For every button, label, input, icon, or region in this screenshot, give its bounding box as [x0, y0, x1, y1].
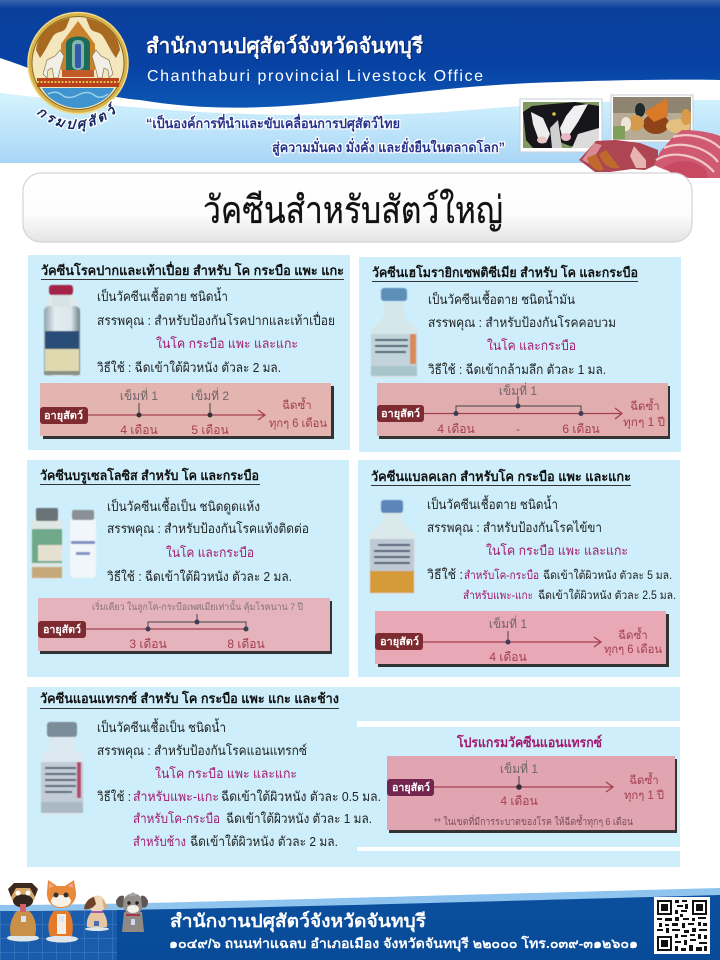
icon: vaccine bottle — [371, 288, 417, 378]
vaccine description: วิธีใช้ : — [96, 789, 131, 804]
panel: foot and mouth disease vaccine — [28, 255, 350, 450]
footer banner — [0, 880, 720, 960]
vaccine description — [427, 290, 616, 377]
vaccine description: เป็นวัคซีนเชื้อตาย ชนิดน้ำมัน — [428, 290, 575, 307]
vaccine description: เป็นวัคซีนเชื้อตาย ชนิดน้ำ — [97, 287, 228, 304]
vaccine description: สรรพคุณ : สำหรับป้องกันโรคแท้งติดต่อ — [107, 521, 309, 537]
footer office name: สำนักงานปศุสัตว์จังหวัดจันทบุรี — [170, 910, 426, 933]
vaccine description: เป็นวัคซีนเชื้อตาย ชนิดน้ำ — [427, 495, 558, 512]
logo: department seal — [28, 12, 128, 114]
header banner — [0, 0, 720, 178]
vaccine description: เป็นวัคซีนเชื้อเป็น ชนิดน้ำ — [97, 718, 226, 735]
main title: วัคซีนสำหรับสัตว์ใหญ่ — [203, 189, 503, 232]
schedule chart: เริ่มเคียว ในลูกโค-กระบือเพศเมียเท่านั้น คุ้มโรคนาน 7 ปี — [92, 600, 303, 613]
vaccine description: ในโค และกระบือ — [166, 545, 254, 560]
slogan: สู่ความมั่นคง มั่งคั่ง และยั่งยืนในตลาดโลก” — [272, 137, 505, 156]
photo: meat — [579, 130, 720, 178]
schedule chart: 5 เดือน — [191, 423, 229, 437]
photo: cows — [520, 99, 602, 152]
schedule chart: ฉีดซ้ำ — [630, 398, 660, 413]
vaccine description: ในโค กระบือ แพะ และแกะ — [156, 336, 298, 351]
schedule chart: 4 เดือน — [120, 423, 158, 437]
vaccine description: ฉีดเข้าใต้ผิวหนัง ตัวละ 2.5 มล. — [538, 589, 676, 602]
program heading: โปรแกรมวัคซีนแอนแทรกซ์ — [456, 733, 602, 750]
vaccine description — [426, 495, 676, 602]
logo caption: กรมปศุสัตว์ — [34, 99, 116, 134]
schedule chart: 4 เดือน — [489, 650, 527, 664]
schedule chart: อายุสัตว์ — [44, 409, 83, 423]
mascot: orange cat — [46, 880, 78, 942]
schedule chart: ฉีดซ้ำ — [282, 397, 312, 412]
slogan — [146, 113, 505, 156]
schedule chart — [40, 383, 334, 439]
vaccine description: สรรพคุณ : สำหรับป้องกันโรคไข้ขา — [427, 520, 602, 536]
schedule chart: ทุกๆ 6 เดือน — [604, 643, 662, 656]
vaccine description: สำหรับโค-กระบือ — [464, 568, 539, 582]
schedule chart — [377, 382, 670, 439]
vaccine description: ฉีดเข้าใต้ผิวหนัง ตัวละ 5 มล. — [543, 569, 672, 582]
panel heading: วัคซีนแอนแทรกซ์ สำหรับ โค กระบือ แพะ แกะ และช้าง — [40, 690, 339, 706]
schedule chart: 6 เดือน — [562, 422, 600, 436]
icon: vaccine bottle — [44, 285, 80, 376]
vaccine description: วิธีใช้ : ฉีดเข้าใต้ผิวหนัง ตัวละ 2 มล. — [106, 569, 292, 584]
schedule chart — [375, 611, 669, 667]
vaccine description: สรรพคุณ : สำหรับป้องกันโรคคอบวม — [428, 315, 616, 331]
vaccine description: ฉีดเข้าใต้ผิวหนัง ตัวละ 1 มล. — [226, 811, 372, 826]
schedule chart — [38, 598, 332, 654]
footer address: ๑๐๔๙/๖ ถนนท่าแฉลบ อำเภอเมือง จังหวัดจันทบุรี ๒๒๐๐๐ โทร.๐๓๙-๓๑๒๖๐๑ — [169, 935, 638, 952]
photo: chickens — [611, 95, 693, 142]
panel heading: วัคซีนโรคปากและเท้าเปื่อย สำหรับ โค กระบือ แพะ แกะ — [41, 261, 344, 278]
schedule chart: ทุกๆ 1 ปี — [624, 789, 664, 802]
panel: blackleg vaccine — [358, 460, 680, 677]
QR code — [654, 897, 710, 954]
schedule chart: ทุกๆ 6 เดือน — [269, 417, 327, 430]
schedule chart: ทุกๆ 1 ปี — [623, 416, 665, 429]
mascot: grey dog — [116, 892, 148, 932]
vaccine description: สรรพคุณ : สำหรับป้องกันโรคปากและเท้าเปื่อย — [97, 312, 335, 329]
schedule chart: ฉีดซ้ำ — [618, 627, 648, 642]
panel heading: วัคซีนบรูเซลโลซิส สำหรับ โค และกระบือ — [40, 467, 259, 484]
panel heading: วัคซีนเฮโมรายิกเซพติซีเมีย สำหรับ โค และกระบือ — [372, 264, 638, 280]
schedule chart: เข็มที่ 1 — [489, 615, 527, 631]
vaccine description: วิธีใช้ : — [426, 567, 463, 582]
schedule chart: อายุสัตว์ — [43, 623, 81, 637]
vaccine description: ในโค และกระบือ — [487, 338, 576, 353]
panel: haemorrhagic septicaemia vaccine — [359, 257, 681, 452]
vaccine description: วิธีใช้ : ฉีดเข้ากล้ามลึก ตัวละ 1 มล. — [427, 362, 606, 377]
vaccine description — [96, 718, 381, 849]
mascot: brown dog — [7, 883, 39, 942]
vaccine description: สรรพคุณ : สำหรับป้องกันโรคแอนแทรกซ์ — [97, 743, 307, 759]
schedule chart: อายุสัตว์ — [380, 635, 419, 649]
icon: vaccine bottle — [369, 500, 415, 594]
vaccine description: สำหรับแพะ-แกะ — [133, 789, 219, 804]
schedule chart: เข็มที่ 2 — [191, 387, 229, 403]
schedule chart: อายุสัตว์ — [392, 781, 430, 795]
vaccine description: ในโค กระบือ แพะ และแกะ — [155, 766, 297, 781]
sub-heading: english name: Chanthaburi provincial Livestock Office — [147, 68, 483, 85]
schedule chart: เข็มที่ 1 — [500, 760, 538, 776]
icon: two vaccine vials — [32, 508, 96, 579]
title box — [23, 173, 692, 242]
schedule chart: 8 เดือน — [227, 637, 265, 651]
panel: brucellosis vaccine — [27, 460, 349, 677]
mascot: tan puppy — [84, 896, 109, 931]
schedule chart: - — [516, 422, 520, 436]
schedule chart: 4 เดือน — [437, 422, 475, 436]
schedule chart: เข็มที่ 1 — [499, 382, 537, 398]
schedule chart: 3 เดือน — [129, 637, 167, 651]
vaccine description: ฉีดเข้าใต้ผิวหนัง ตัวละ 0.5 มล. — [221, 789, 381, 804]
panel heading: วัคซีนแบลคเลก สำหรับโค กระบือ แพะ และแกะ — [371, 468, 631, 484]
vaccine description: สำหรับโค-กระบือ — [133, 811, 220, 826]
panel: anthrax vaccine — [27, 687, 680, 867]
vaccine description — [106, 497, 309, 584]
vaccine description: ในโค กระบือ แพะ และแกะ — [486, 543, 628, 558]
vaccine description: สำหรับแพะ-แกะ — [463, 589, 533, 602]
schedule chart — [387, 756, 677, 833]
schedule chart: ฉีดซ้ำ — [629, 772, 659, 787]
slogan: “เป็นองค์การที่นำและขับเคลื่อนการปศุสัตว์ไทย — [146, 113, 400, 132]
schedule chart: ** ในเขตที่มีการระบาดของโรค ให้ฉีดซ้ำทุกๆ 6 เดือน — [434, 814, 633, 828]
vaccine description — [96, 287, 335, 375]
vaccine description: เป็นวัคซีนเชื้อเป็น ชนิดดูดแห้ง — [107, 497, 260, 515]
schedule chart: 4 เดือน — [500, 794, 538, 808]
icon: vaccine bottle — [41, 722, 83, 815]
vaccine description: สำหรับช้าง — [133, 834, 186, 849]
vaccine description: วิธีใช้ : ฉีดเข้าใต้ผิวหนัง ตัวละ 2 มล. — [96, 360, 281, 375]
schedule chart: เข็มที่ 1 — [120, 387, 158, 403]
schedule chart: อายุสัตว์ — [381, 407, 420, 421]
heading: office name: สำนักงานปศุสัตว์จังหวัดจันทบุรี — [146, 34, 424, 60]
vaccine description: ฉีดเข้าใต้ผิวหนัง ตัวละ 2 มล. — [190, 834, 338, 849]
